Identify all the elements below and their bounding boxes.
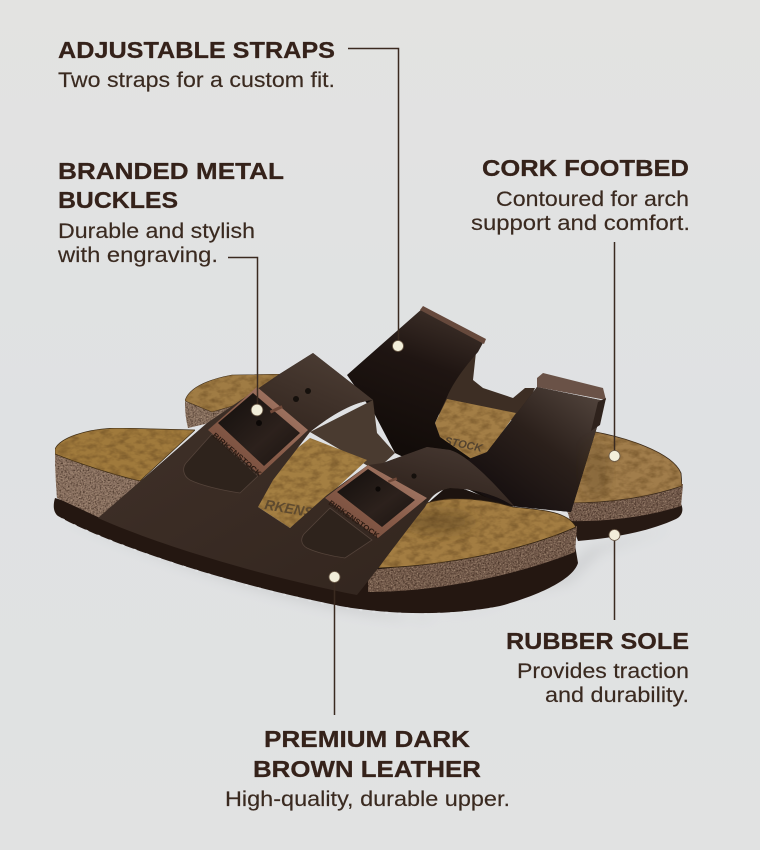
callout: rubber sole: Provides traction xyxy=(517,659,689,683)
callout: adjustable straps: Two straps for a custom fit. xyxy=(58,68,335,92)
leader line: cork footbed xyxy=(614,242,616,456)
callout: premium dark brown leather xyxy=(225,726,510,811)
leather upper xyxy=(98,353,515,595)
back sandal heel cork side xyxy=(185,402,240,428)
leader line: adjustable straps xyxy=(348,48,398,345)
callout: premium dark brown leather: BROWN LEATHER xyxy=(253,756,481,782)
callout: premium dark brown leather: High-quality, durable upper. xyxy=(225,787,510,811)
inside far leather wall xyxy=(430,345,535,420)
dot: straps xyxy=(392,340,404,352)
strap tail two xyxy=(302,508,372,558)
marker dots xyxy=(251,340,620,582)
dot: buckle xyxy=(251,404,263,416)
shadow under second strap xyxy=(420,484,516,512)
footbed toe shading xyxy=(406,511,474,533)
back sandal xyxy=(185,306,683,541)
leader line: branded metal buckles xyxy=(228,258,258,410)
second strap hole xyxy=(411,473,417,479)
buckle two engraving: BIRKENSTOCK xyxy=(327,498,382,540)
callout: rubber sole xyxy=(506,628,689,707)
back sandal footbed toe xyxy=(570,431,682,503)
callout: branded metal buckles xyxy=(57,158,284,267)
upper strap holes xyxy=(293,388,311,402)
front footbed heel xyxy=(55,428,195,481)
back sandal rubber sole xyxy=(565,504,682,541)
callout: adjustable straps xyxy=(58,37,335,92)
leader line: rubber sole xyxy=(614,535,616,620)
callout: rubber sole: RUBBER SOLE xyxy=(506,628,689,654)
callout: branded metal buckles: Durable and stylish xyxy=(58,219,255,243)
back sandal footbed heel xyxy=(185,374,292,412)
leader line: premium leather xyxy=(334,577,336,715)
dot: sole xyxy=(609,530,620,540)
buckle one xyxy=(208,387,308,479)
back sandal toe cork side xyxy=(565,484,683,521)
cork visible between back straps xyxy=(435,399,516,460)
callout: rubber sole: and durability. xyxy=(545,683,689,707)
callout: branded metal buckles: BUCKLES xyxy=(58,187,178,213)
callout: cork footbed: CORK FOOTBED xyxy=(482,155,689,181)
callout: cork footbed: Contoured for arch xyxy=(496,187,689,211)
callout: branded metal buckles: BRANDED METAL xyxy=(58,158,284,184)
back outer strap highlight xyxy=(440,387,605,512)
second strap leather xyxy=(383,447,515,507)
front rubber sole xyxy=(54,498,578,613)
dot: footbed xyxy=(609,450,620,462)
callout: branded metal buckles: with engraving. xyxy=(57,243,218,267)
sandal pair photo illustration xyxy=(54,306,683,620)
footbed lettering: RKENS xyxy=(263,496,315,521)
ground shadow xyxy=(62,514,672,620)
sole tread ridges xyxy=(62,519,500,614)
back strap buckle tops xyxy=(420,306,486,344)
front cork side xyxy=(55,452,145,518)
strap tail one xyxy=(184,434,258,493)
footbed shading by back strap xyxy=(582,442,610,498)
back inner strap xyxy=(347,308,605,512)
callout: premium dark brown leather: PREMIUM DARK xyxy=(264,726,470,752)
buckle one engraving: BIRKENSTOCK xyxy=(211,431,264,479)
back footbed lettering: STOCK xyxy=(443,435,484,455)
callout: cork footbed: support and comfort. xyxy=(471,211,690,235)
front sandal xyxy=(54,353,578,614)
dot: leather xyxy=(329,572,340,582)
strap interior shade xyxy=(310,400,395,466)
buckle two xyxy=(325,465,427,540)
callout: cork footbed xyxy=(471,155,690,235)
front footbed toe xyxy=(378,499,576,568)
callout: adjustable straps: ADJUSTABLE STRAPS xyxy=(58,37,335,63)
front footbed arch xyxy=(258,438,367,528)
upper strap leather xyxy=(262,353,373,432)
